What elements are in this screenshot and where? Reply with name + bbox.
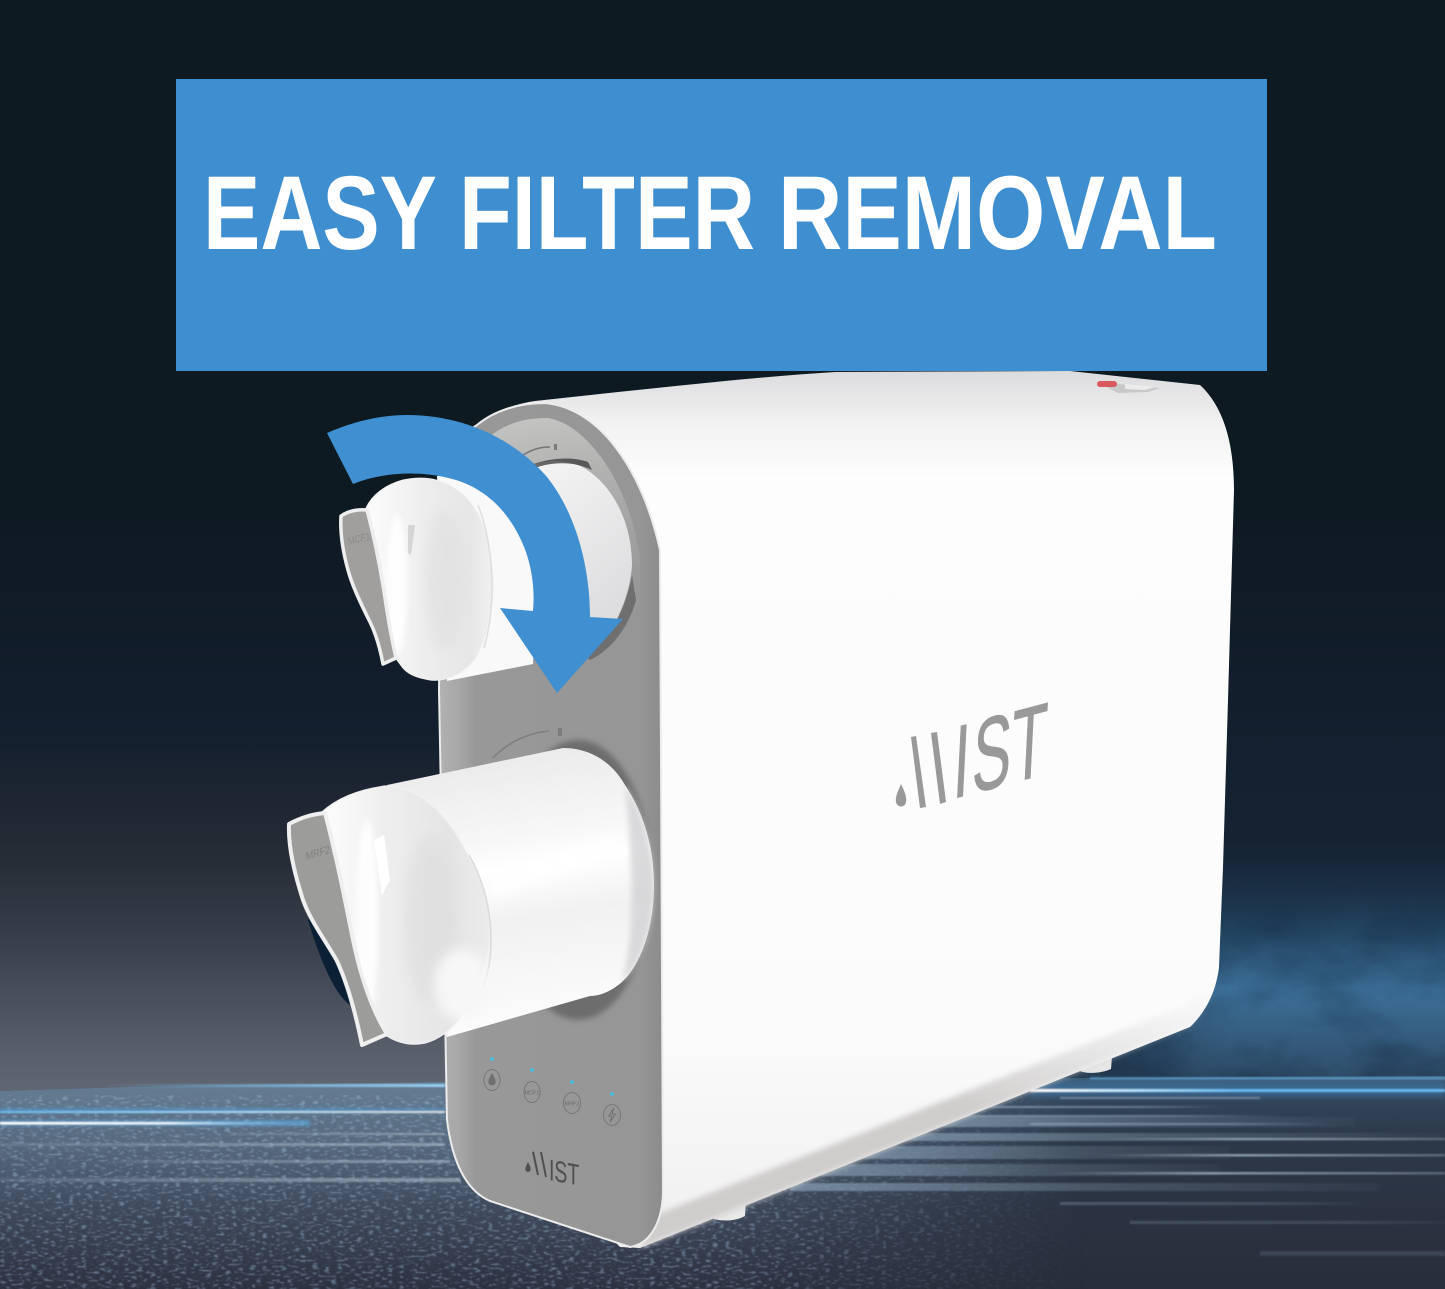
title text: FILTER <box>459 155 755 272</box>
large brand logo on body: IST <box>951 681 1050 822</box>
barrel highlight <box>490 835 620 900</box>
device: water filter unit <box>289 371 1234 1248</box>
background: reflective floor <box>0 1076 1445 1289</box>
unit feet <box>708 1056 1112 1220</box>
large filter cap <box>322 786 490 1044</box>
title text <box>203 155 1217 272</box>
status: water <box>484 1057 500 1090</box>
title text: REMOVAL <box>778 155 1217 272</box>
large filter MRF2 <box>289 748 654 1045</box>
small brand logo on panel: IST <box>549 1154 579 1193</box>
barrel right shade <box>622 785 654 982</box>
background: dark sky <box>0 0 1445 522</box>
lower socket recess <box>504 740 652 1020</box>
grey front panel <box>439 403 663 1247</box>
title banner <box>176 79 1267 371</box>
status: MRF2: MRF2 <box>565 1102 579 1108</box>
background: blue mist on the right <box>1064 869 1445 1078</box>
lower lock indicator arc <box>493 728 562 758</box>
large handle <box>289 813 387 1045</box>
large filter barrel <box>387 748 654 1037</box>
top lock indicator arc <box>522 444 557 456</box>
dark shadow under handle <box>308 905 350 1005</box>
status icons row <box>484 1057 620 1126</box>
rotation arrow <box>327 415 623 693</box>
large handle label: MRF2 <box>306 844 330 863</box>
status: MCF1: MCF1 <box>525 1090 539 1096</box>
small brand logo on panel <box>525 1152 579 1193</box>
upper recess around socket <box>442 418 640 660</box>
large brand logo on body <box>896 681 1050 822</box>
top socket sleeve <box>510 459 636 660</box>
floor light streaks: left <box>0 1084 460 1182</box>
small filter cap <box>366 478 493 680</box>
small filter barrel <box>437 475 534 681</box>
floor sparkle texture <box>0 1095 1029 1289</box>
small filter MCF1 <box>341 475 534 681</box>
white body shell <box>477 371 1234 1248</box>
status: power <box>604 1092 620 1126</box>
small handle <box>341 510 396 664</box>
small cap gloss <box>387 505 492 655</box>
floor light streaks: right <box>790 1077 1445 1256</box>
body lower edge shading <box>640 967 1219 1248</box>
top control pad <box>1097 381 1160 393</box>
title text: EASY <box>203 155 437 272</box>
small handle label: MCF1 <box>348 530 371 548</box>
background: lower horizon gradient <box>0 636 1445 1091</box>
large cap gloss <box>356 820 491 1021</box>
